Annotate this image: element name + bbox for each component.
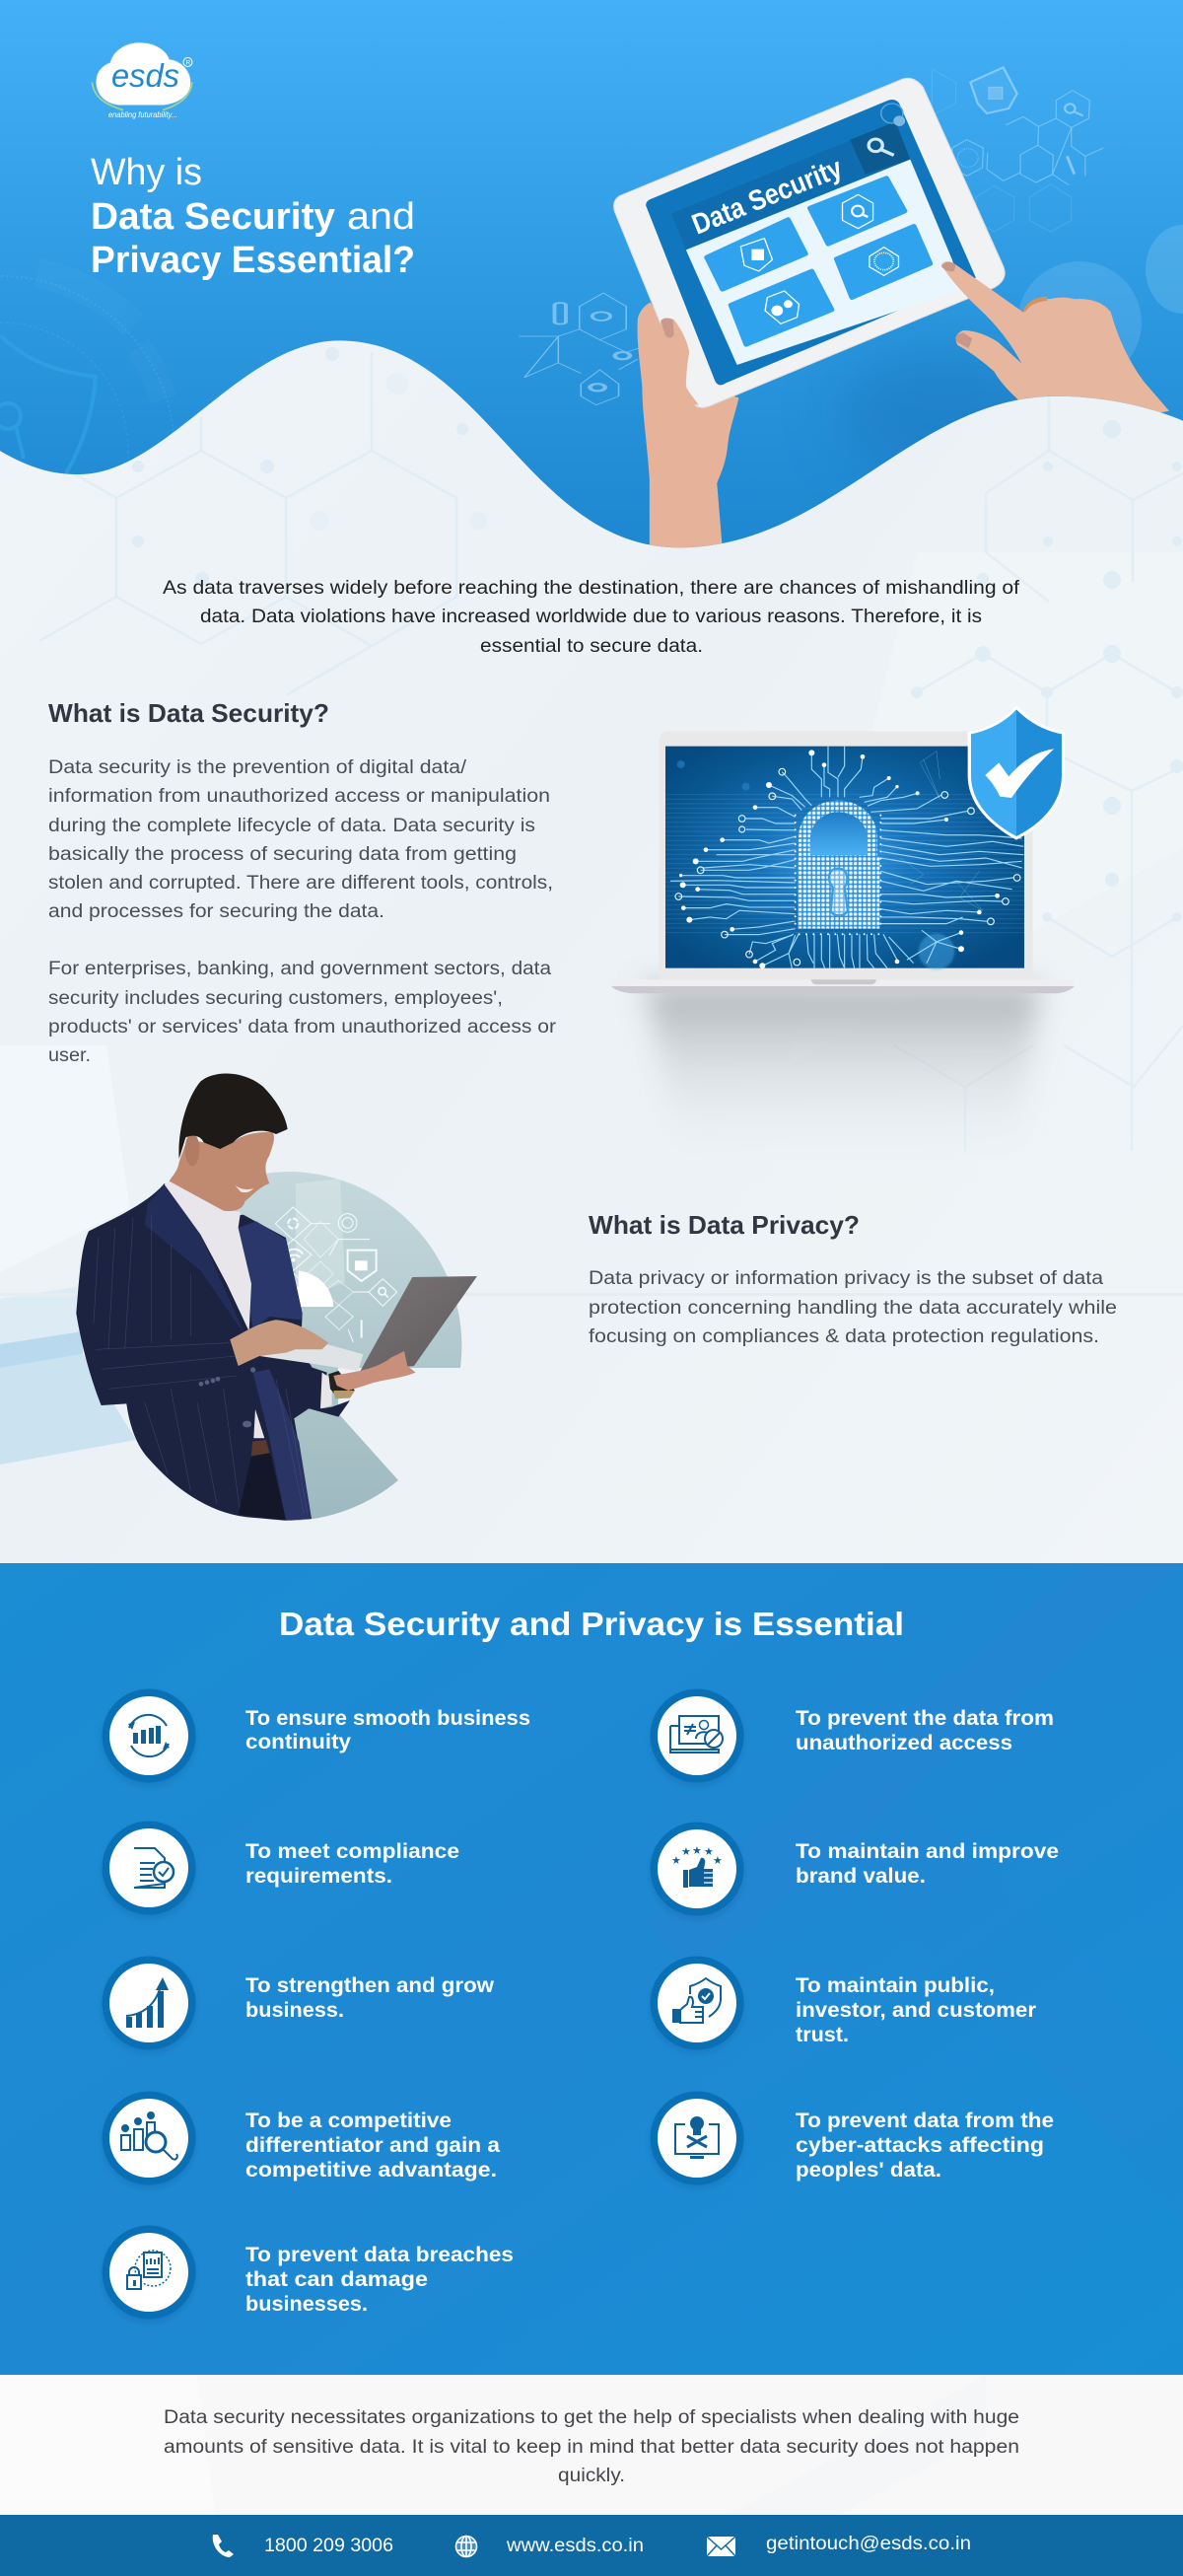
neck and face xyxy=(170,1132,274,1211)
belt and trousers xyxy=(251,1440,269,1457)
heading: what is data security: What is Data Security? xyxy=(48,698,329,728)
text block: data privacy definition xyxy=(589,1268,1117,1347)
text block: data security definition: products' or services' data from unauthorized access or xyxy=(48,1017,557,1038)
icon: thumbs up with stars: ★ xyxy=(704,1846,714,1858)
item text: To prevent data breaches xyxy=(245,2244,514,2266)
item text: To strengthen and grow xyxy=(245,1974,495,1997)
watch xyxy=(328,1371,355,1398)
icon: mail xyxy=(707,2537,735,2556)
page background xyxy=(0,0,1183,1563)
supporting hands xyxy=(92,82,192,110)
text block: data security definition xyxy=(48,757,557,1066)
main title: Why is xyxy=(91,152,202,193)
item text xyxy=(796,1707,1054,1754)
laptop lid xyxy=(360,1276,477,1372)
laptop base xyxy=(611,979,1075,986)
wordmark: esds xyxy=(111,57,179,94)
item text: continuity xyxy=(245,1731,351,1753)
item: strengthen business xyxy=(102,1957,495,2054)
tagline: enabling futurability... xyxy=(108,110,177,119)
icon: shield and thumb xyxy=(650,1957,744,2054)
main title: Privacy Essential? xyxy=(91,240,415,281)
item text: that can damage xyxy=(245,2268,428,2291)
item text xyxy=(796,2110,1054,2182)
hair xyxy=(178,1073,288,1159)
panel: closing note xyxy=(0,2375,1183,2515)
jacket buttons xyxy=(199,1367,255,1427)
decorative bubbles xyxy=(838,225,1183,483)
item text xyxy=(245,2110,500,2182)
icon: ranked bars with magnifier xyxy=(102,2091,196,2189)
icon: document check xyxy=(102,1821,196,1919)
text block: data security definition: For enterprises, banking, and government sectors, data xyxy=(48,959,551,979)
email: getintouch@esds.co.in xyxy=(766,2534,971,2554)
item: unauthorized access xyxy=(650,1688,1054,1787)
item text: To prevent data from the xyxy=(796,2110,1054,2132)
hand: holding tablet xyxy=(638,303,738,549)
footer contact bar xyxy=(0,2515,1183,2576)
item text xyxy=(245,1840,459,1888)
tablet tile icons xyxy=(740,194,898,323)
laptop shadow xyxy=(646,986,1040,1159)
icon: thumbs up with stars: ★ xyxy=(681,1846,691,1858)
pinstripes xyxy=(94,1215,308,1514)
icon: thumbs up with stars xyxy=(650,1823,744,1920)
panel: reasons data security and privacy is essential xyxy=(0,1563,1183,2375)
item text: trust. xyxy=(796,2024,849,2046)
item text: peoples' data. xyxy=(796,2159,941,2182)
person with laptop illustration xyxy=(76,1073,477,1521)
item text: unauthorized access xyxy=(796,1732,1012,1754)
item text: business. xyxy=(245,1999,344,2022)
item text: competitive advantage. xyxy=(245,2159,497,2182)
teal disc xyxy=(116,1172,461,1521)
item text: To ensure smooth business xyxy=(245,1707,530,1730)
item: competitive advantage xyxy=(102,2091,500,2189)
intro paragraph xyxy=(163,578,1020,657)
icon: chart cycle xyxy=(102,1688,196,1787)
hand: touching screen xyxy=(941,261,1169,421)
closing text: Data security necessitates organizations to get the help of specialists when dealing with huge xyxy=(164,2407,1019,2428)
tablet tiles xyxy=(707,179,931,344)
decorative circular lock xyxy=(0,275,174,474)
text block: data security definition: information from unauthorized access or manipulation xyxy=(48,786,550,807)
text block: data security definition: during the complete lifecycle of data. Data security is xyxy=(48,816,535,836)
icon: locked report xyxy=(102,2225,196,2324)
icon: thumbs up with stars: ★ xyxy=(671,1855,681,1867)
closing text xyxy=(164,2407,1019,2486)
suit jacket xyxy=(76,1183,350,1521)
item text: To maintain public, xyxy=(796,1974,995,1997)
item: business continuity xyxy=(102,1688,530,1787)
shirt cuff xyxy=(320,1373,332,1408)
laptop base xyxy=(259,1343,363,1371)
item text xyxy=(245,2244,514,2316)
hero banner xyxy=(0,0,1183,625)
icon: thumbs up with stars: ★ xyxy=(713,1855,723,1867)
text block: data security definition: security includes securing customers, employees', xyxy=(48,988,503,1009)
website: www.esds.co.in xyxy=(506,2536,644,2556)
main title xyxy=(91,152,415,281)
item text: requirements. xyxy=(245,1865,392,1888)
item: cyber attacks xyxy=(650,2091,1054,2189)
item text: businesses. xyxy=(245,2293,368,2316)
text block: data privacy definition: focusing on compliances & data protection regulations. xyxy=(589,1326,1099,1347)
main title: and xyxy=(347,196,415,238)
laptop with padlock illustration xyxy=(611,705,1075,1159)
icon: globe xyxy=(455,2536,477,2557)
shirt hem xyxy=(253,1409,264,1438)
lapels xyxy=(145,1184,244,1334)
icon: growth arrow xyxy=(102,1957,196,2054)
item: trust xyxy=(650,1957,1036,2054)
item text xyxy=(796,1840,1059,1888)
item text: cyber-attacks affecting xyxy=(796,2134,1044,2157)
typing hand xyxy=(230,1320,328,1366)
item: data breaches xyxy=(102,2225,514,2324)
item text: To meet compliance xyxy=(245,1840,459,1863)
icon: thumbs up with stars: ★ xyxy=(692,1845,702,1857)
text block: data security definition: stolen and corrupted. There are different tools, controls, xyxy=(48,873,553,894)
holding hand xyxy=(333,1351,416,1391)
registered mark: R xyxy=(185,59,191,67)
intro paragraph: As data traverses widely before reaching the destination, there are chances of mishandling of xyxy=(163,578,1020,599)
item text: differentiator and gain a xyxy=(245,2134,500,2157)
phone number: 1800 209 3006 xyxy=(264,2536,393,2556)
text block: data security definition: Data security is the prevention of digital data/ xyxy=(48,757,467,778)
icon: phone xyxy=(213,2535,234,2557)
main title: Data Security xyxy=(91,196,335,238)
item text: To prevent the data from xyxy=(796,1707,1054,1730)
closing text: quickly. xyxy=(558,2466,625,2486)
shirt xyxy=(165,1180,251,1331)
text block: data security definition: user. xyxy=(48,1045,91,1066)
hand: thumb on tablet xyxy=(661,318,699,405)
logo xyxy=(92,42,192,119)
tablet xyxy=(614,78,1005,407)
jacket front panel xyxy=(253,1369,312,1521)
intro paragraph: essential to secure data. xyxy=(480,636,703,657)
laptop screen xyxy=(665,747,1024,969)
circuit nodes xyxy=(679,750,1000,968)
text block: data privacy definition: Data privacy or information privacy is the subset of data xyxy=(589,1268,1103,1289)
intro paragraph: data. Data violations have increased worldwide due to various reasons. Therefore, it is xyxy=(200,607,982,627)
tablet title: Data Security xyxy=(688,153,847,241)
item: compliance xyxy=(102,1821,459,1919)
hexagon network background xyxy=(39,347,1183,1151)
section heading: Data Security and Privacy is Essential xyxy=(279,1606,904,1642)
item text: To be a competitive xyxy=(245,2110,452,2132)
item: brand value xyxy=(650,1823,1059,1920)
closing text: amounts of sensitive data. It is vital to keep in mind that better data security does not happen xyxy=(164,2437,1019,2458)
item text xyxy=(796,1974,1036,2046)
item text: To maintain and improve xyxy=(796,1840,1059,1863)
item text xyxy=(245,1707,530,1753)
cloud xyxy=(96,42,191,106)
floating hex icons xyxy=(251,1207,397,1342)
hexagon icon network xyxy=(933,67,1103,232)
item text xyxy=(245,1974,495,2022)
icon: blocked laptop user xyxy=(650,1688,744,1787)
icon: skull on monitor xyxy=(650,2091,744,2189)
laptop body xyxy=(659,732,1033,979)
padlock xyxy=(798,801,879,929)
circuit traces xyxy=(670,747,1023,968)
text block: data security definition: basically the process of securing data from getting xyxy=(48,844,517,865)
item text: brand value. xyxy=(796,1865,926,1888)
item text: investor, and customer xyxy=(796,1999,1036,2022)
text block: data privacy definition: protection concerning handling the data accurately while xyxy=(589,1298,1117,1319)
heading: what is data privacy: What is Data Privacy? xyxy=(589,1210,860,1240)
text block: data security definition: and processes for securing the data. xyxy=(48,901,384,922)
security shield xyxy=(968,705,1065,840)
